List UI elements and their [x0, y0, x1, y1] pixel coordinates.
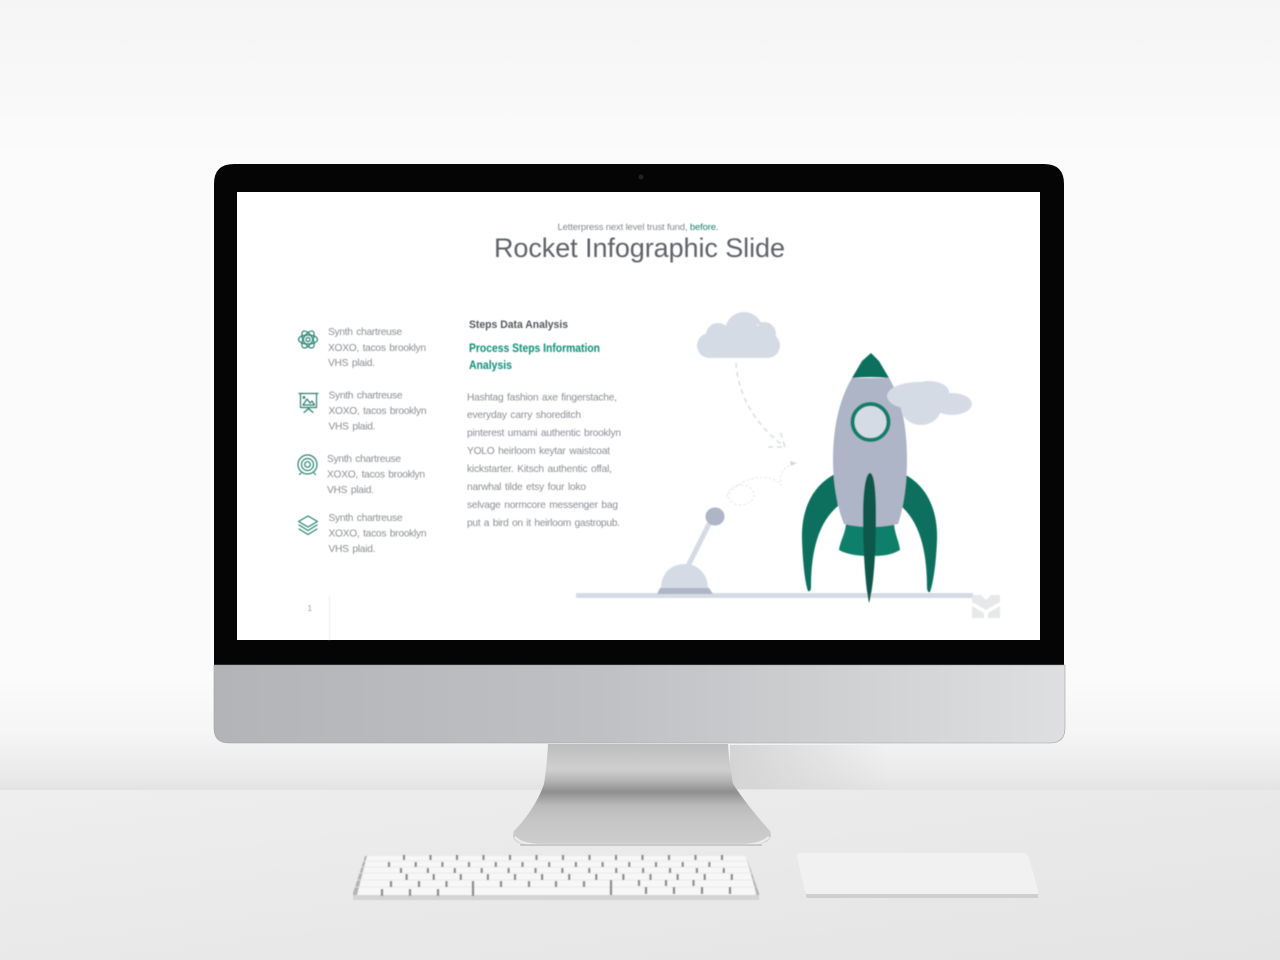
slide content: [298, 222, 1000, 640]
body paragraph: YOLO heirloom keytar waistcoat: [467, 446, 610, 457]
process subheading: Analysis: [469, 360, 512, 372]
rocket body: [833, 378, 907, 527]
trackpad: [797, 853, 1038, 898]
body paragraph: kickstarter. Kitsch authentic offal,: [467, 464, 612, 475]
monitor body: [214, 164, 1065, 743]
process subheading: [469, 343, 600, 372]
feature 3: target icon and text: XOXO, tacos brooklyn: [327, 470, 425, 480]
feature 3: target icon and text: Synth chartreuse: [327, 454, 401, 465]
feature 4: layers icon and text: XOXO, tacos brooklyn: [328, 528, 426, 540]
feature 3: target icon and text: VHS plaid.: [327, 485, 374, 496]
feature 2: presentation board icon and text: VHS plaid.: [328, 422, 376, 432]
feature 2: presentation board icon and text: [299, 390, 426, 432]
cloud beside rocket: [887, 381, 972, 425]
body paragraph: everyday carry shoreditch: [467, 410, 581, 421]
feature 1: atom icon and text: Synth chartreuse: [328, 327, 402, 338]
arrow head: [790, 461, 797, 466]
porthole: [852, 404, 888, 440]
keyboard: [353, 855, 759, 900]
feature 2: presentation board icon and text: Synth chartreuse: [328, 390, 403, 402]
nose cone: [852, 353, 889, 378]
process subheading: Process Steps Information: [469, 343, 600, 355]
feature list: [298, 327, 426, 555]
body paragraph: selvage normcore messenger bag: [467, 500, 618, 511]
title: Rocket Infographic Slide: [494, 233, 785, 263]
feature 4: layers icon and text: [298, 513, 426, 555]
feature 1: atom icon and text: XOXO, tacos brooklyn: [328, 343, 426, 354]
feature 3: target icon and text: [298, 454, 425, 496]
page number: 1: [308, 604, 312, 613]
feature 2: presentation board icon and text: XOXO, tacos brooklyn: [328, 406, 426, 417]
center fin: [863, 473, 876, 603]
feature 1: atom icon and text: [298, 327, 426, 369]
feature 4: layers icon and text: Synth chartreuse: [328, 513, 403, 524]
dotted looping arrow: [726, 463, 796, 505]
rocket: [802, 353, 937, 603]
right fin: [901, 474, 937, 592]
engine skirt: [839, 524, 900, 556]
dashed arrow from cloud: [736, 363, 785, 447]
brand logo mark: [972, 595, 1000, 618]
keyboard key gaps: [382, 855, 732, 896]
launch platform line: [576, 593, 973, 598]
subtitle: Letterpress next level trust fund, before.: [558, 222, 718, 233]
launch lever: [657, 508, 724, 594]
slide screen: [237, 192, 1040, 640]
steps heading: Steps Data Analysis: [469, 319, 568, 331]
body paragraph: put a bird on it heirloom gastropub.: [467, 518, 620, 529]
feature 4: layers icon and text: VHS plaid.: [328, 544, 376, 555]
monitor stand: [513, 744, 771, 846]
body paragraph: [467, 392, 621, 529]
body paragraph: pinterest umami authentic brooklyn: [467, 428, 621, 439]
feature 1: atom icon and text: VHS plaid.: [328, 358, 375, 369]
body paragraph: narwhal tilde etsy four loko: [467, 482, 586, 493]
left fin: [802, 474, 838, 591]
upper cloud: [697, 312, 780, 358]
body paragraph: Hashtag fashion axe fingerstache,: [467, 392, 617, 404]
footer divider: [329, 596, 330, 640]
